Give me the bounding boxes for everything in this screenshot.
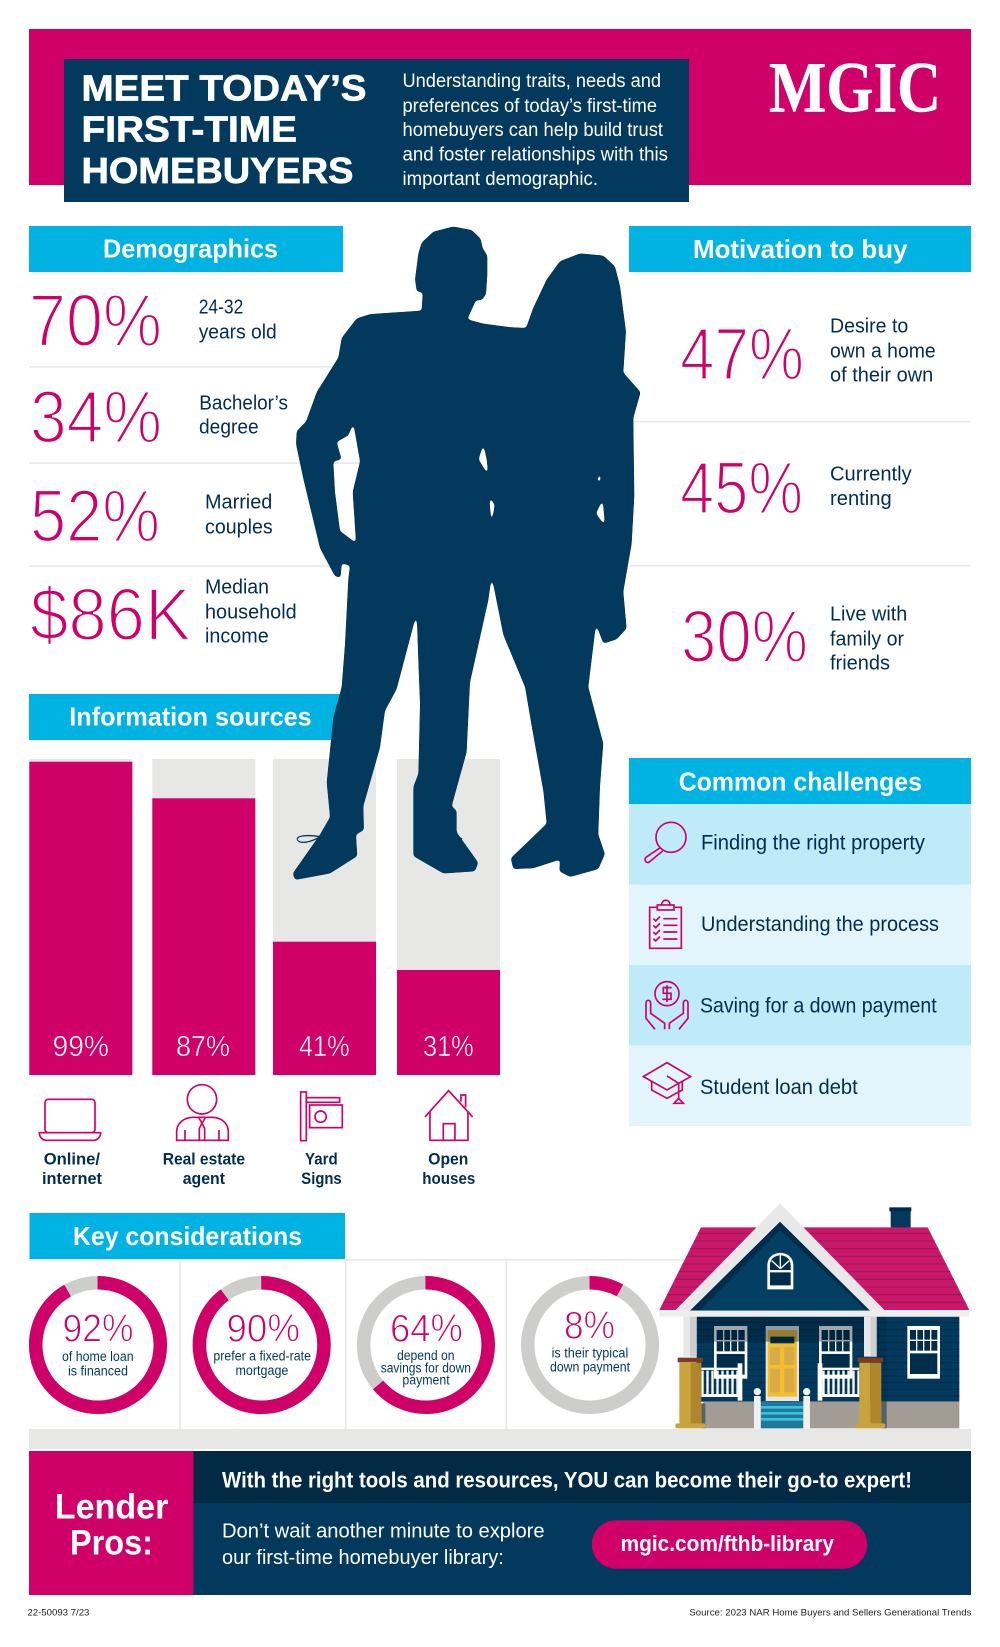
panel: information sources bbox=[29, 694, 500, 1188]
stat: 52% married couples: Married bbox=[205, 492, 272, 514]
row: understanding the process bbox=[629, 884, 971, 965]
intro text: Understanding traits, needs and bbox=[402, 71, 661, 92]
bar: online 99% bbox=[29, 759, 132, 1075]
heading: key considerations bbox=[30, 1213, 345, 1259]
donut: 90%: mortgage bbox=[236, 1363, 288, 1378]
bar: real estate agent 87% bbox=[152, 759, 255, 1075]
bar: online 99%: 99% bbox=[52, 1031, 109, 1063]
stat: 52% married couples bbox=[30, 475, 273, 558]
label: real estate agent: Real estate bbox=[163, 1149, 245, 1168]
stat: 34% Bachelor's degree bbox=[30, 375, 288, 458]
stat: $86K median household income: income bbox=[205, 626, 269, 648]
call to action text: our first-time homebuyer library: bbox=[222, 1546, 504, 1569]
stat: 34% Bachelor's degree: 34% bbox=[30, 375, 162, 458]
title panel bbox=[64, 59, 689, 202]
donut: 64%: depend on bbox=[397, 1348, 454, 1363]
stat: 45%: renting bbox=[830, 488, 892, 510]
heading: motivation bbox=[629, 226, 971, 272]
stat: 70% 24-32 years old: years old bbox=[199, 322, 277, 344]
row: saving for a down payment bbox=[629, 965, 971, 1046]
panel: key considerations bbox=[29, 1213, 971, 1449]
stat: 45%: Currently bbox=[830, 464, 912, 486]
row: finding the right property: Finding the right property bbox=[701, 831, 925, 854]
stat: 47%: of their own bbox=[830, 365, 933, 387]
bar: open houses 31% bbox=[397, 759, 500, 1075]
intro text: preferences of today’s first-time bbox=[402, 96, 657, 117]
heading: common challenges bbox=[629, 758, 971, 804]
label: yard signs: Yard bbox=[305, 1149, 338, 1168]
stat: 47% bbox=[680, 312, 936, 395]
stat: $86K median household income: Median bbox=[205, 577, 269, 599]
logo: MGIC: MGIC bbox=[769, 48, 941, 128]
donut: 64%: 64% bbox=[390, 1308, 463, 1351]
heading: common challenges: Common challenges bbox=[679, 767, 922, 797]
intro text bbox=[402, 71, 668, 190]
row: finding the right property bbox=[629, 804, 971, 884]
stat: 70% 24-32 years old: 24-32 bbox=[199, 296, 243, 318]
label: real estate agent bbox=[163, 1149, 245, 1188]
heading: motivation: Motivation to buy bbox=[693, 234, 908, 264]
stat: 34% Bachelor's degree: degree bbox=[199, 416, 259, 438]
label: online/internet bbox=[42, 1149, 102, 1188]
stat: $86K median household income: $86K bbox=[30, 573, 191, 656]
intro text: important demographic. bbox=[402, 169, 598, 190]
row: saving for a down payment: Saving for a down payment bbox=[700, 995, 937, 1018]
panel: lender pros call to action bbox=[29, 1451, 971, 1595]
label: open houses bbox=[422, 1149, 475, 1188]
stat: $86K median household income: household bbox=[205, 601, 297, 623]
stat: 47%: Desire to bbox=[830, 316, 908, 338]
donut: 8%: 8% bbox=[564, 1304, 615, 1347]
callout label: Lender Pros bbox=[29, 1451, 194, 1595]
call to action text bbox=[222, 1520, 545, 1569]
donut: 8%: down payment bbox=[550, 1360, 630, 1375]
label: open houses: Open bbox=[428, 1149, 468, 1168]
label: online/internet: internet bbox=[42, 1169, 102, 1188]
donut: 92%: of home loan bbox=[62, 1349, 134, 1364]
silhouette of couple bbox=[293, 226, 641, 880]
footer: document code: 22-50093 7/23 bbox=[27, 1608, 89, 1619]
row: understanding the process: Understanding the process bbox=[701, 913, 939, 936]
stat: 45%: 45% bbox=[680, 446, 803, 529]
label: online/internet: Online/ bbox=[44, 1149, 100, 1168]
icon: agent bbox=[177, 1085, 228, 1140]
donut: 8% bbox=[528, 1283, 652, 1407]
icon: hands holding coin bbox=[646, 982, 688, 1029]
icon: laptop bbox=[39, 1099, 101, 1140]
callout label: Lender Pros: Lender bbox=[55, 1487, 169, 1526]
panel: demographics bbox=[29, 226, 374, 656]
stat: 52% married couples: 52% bbox=[30, 475, 160, 558]
header banner bbox=[29, 29, 971, 202]
call to action text: Don’t wait another minute to explore bbox=[222, 1520, 545, 1543]
stat: $86K median household income bbox=[30, 573, 297, 656]
stat: 30%: friends bbox=[830, 652, 890, 674]
heading: key considerations: Key considerations bbox=[73, 1221, 302, 1251]
donut: 90%: 90% bbox=[226, 1308, 300, 1351]
heading: demographics: Demographics bbox=[103, 234, 278, 264]
donut: 90%: prefer a fixed-rate bbox=[213, 1348, 311, 1363]
donut: 92%: is financed bbox=[68, 1364, 128, 1379]
donut: 64%: savings for down bbox=[381, 1360, 471, 1375]
stat: 30%: family or bbox=[830, 628, 904, 650]
label: yard signs bbox=[301, 1149, 342, 1188]
title: FIRST-TIME bbox=[82, 109, 297, 150]
stat: 34% Bachelor's degree: Bachelor’s bbox=[199, 392, 288, 414]
icon: clipboard checklist bbox=[650, 900, 681, 948]
callout label: Lender Pros: Pros: bbox=[70, 1523, 153, 1562]
stat: 47%: 47% bbox=[680, 312, 804, 395]
stat: 30%: Live with bbox=[830, 604, 907, 626]
stat: 45% bbox=[680, 446, 912, 529]
donut: 64% bbox=[364, 1283, 488, 1407]
heading: demographics bbox=[29, 226, 343, 272]
bar: real estate agent 87%: 87% bbox=[176, 1031, 230, 1063]
donut: 90% bbox=[199, 1283, 324, 1407]
row: student loan debt: Student loan debt bbox=[700, 1076, 858, 1099]
title: HOMEBUYERS bbox=[82, 150, 354, 191]
stat: 47%: own a home bbox=[830, 340, 936, 362]
donut: 8%: is their typical bbox=[552, 1345, 628, 1360]
panel: motivation to buy bbox=[629, 226, 971, 678]
icon: magnifying glass bbox=[645, 822, 686, 862]
stat: 30%: 30% bbox=[681, 595, 808, 678]
label: yard signs: Signs bbox=[301, 1169, 342, 1188]
icon: house outline bbox=[425, 1091, 473, 1140]
title: MEET TODAY’S bbox=[82, 68, 366, 109]
row: student loan debt bbox=[629, 1046, 971, 1126]
stat: 70% 24-32 years old bbox=[29, 279, 277, 362]
icon: yard sign bbox=[301, 1092, 342, 1141]
headline: With the right tools and resources, YOU can become their go-to expert! bbox=[222, 1468, 912, 1493]
bar: yard signs 41%: 41% bbox=[299, 1031, 350, 1063]
label: real estate agent: agent bbox=[183, 1169, 225, 1188]
donut: 92%: 92% bbox=[62, 1308, 134, 1351]
illustration: house bbox=[659, 1203, 969, 1428]
button: library link bbox=[592, 1520, 867, 1569]
bar: yard signs 41% bbox=[273, 759, 376, 1075]
stat: 30% bbox=[681, 595, 907, 678]
intro text: homebuyers can help build trust bbox=[402, 120, 664, 141]
stat: 52% married couples: couples bbox=[205, 516, 273, 538]
intro text: and foster relationships with this bbox=[402, 145, 668, 166]
donut: 92% bbox=[36, 1283, 160, 1407]
icon: graduation cap bbox=[643, 1063, 691, 1103]
title bbox=[82, 68, 366, 191]
footer: source: Source: 2023 NAR Home Buyers and Sellers Generational Trends bbox=[689, 1608, 972, 1619]
button: library link: mgic.com/fthb-library bbox=[620, 1531, 835, 1556]
panel: common challenges bbox=[629, 758, 971, 1126]
heading: information sources bbox=[29, 694, 354, 740]
bar: open houses 31%: 31% bbox=[423, 1031, 474, 1063]
donut: 64%: payment bbox=[402, 1372, 450, 1387]
heading: information sources: Information sources bbox=[69, 701, 312, 731]
stat: 70% 24-32 years old: 70% bbox=[29, 279, 162, 362]
label: open houses: houses bbox=[422, 1169, 475, 1188]
